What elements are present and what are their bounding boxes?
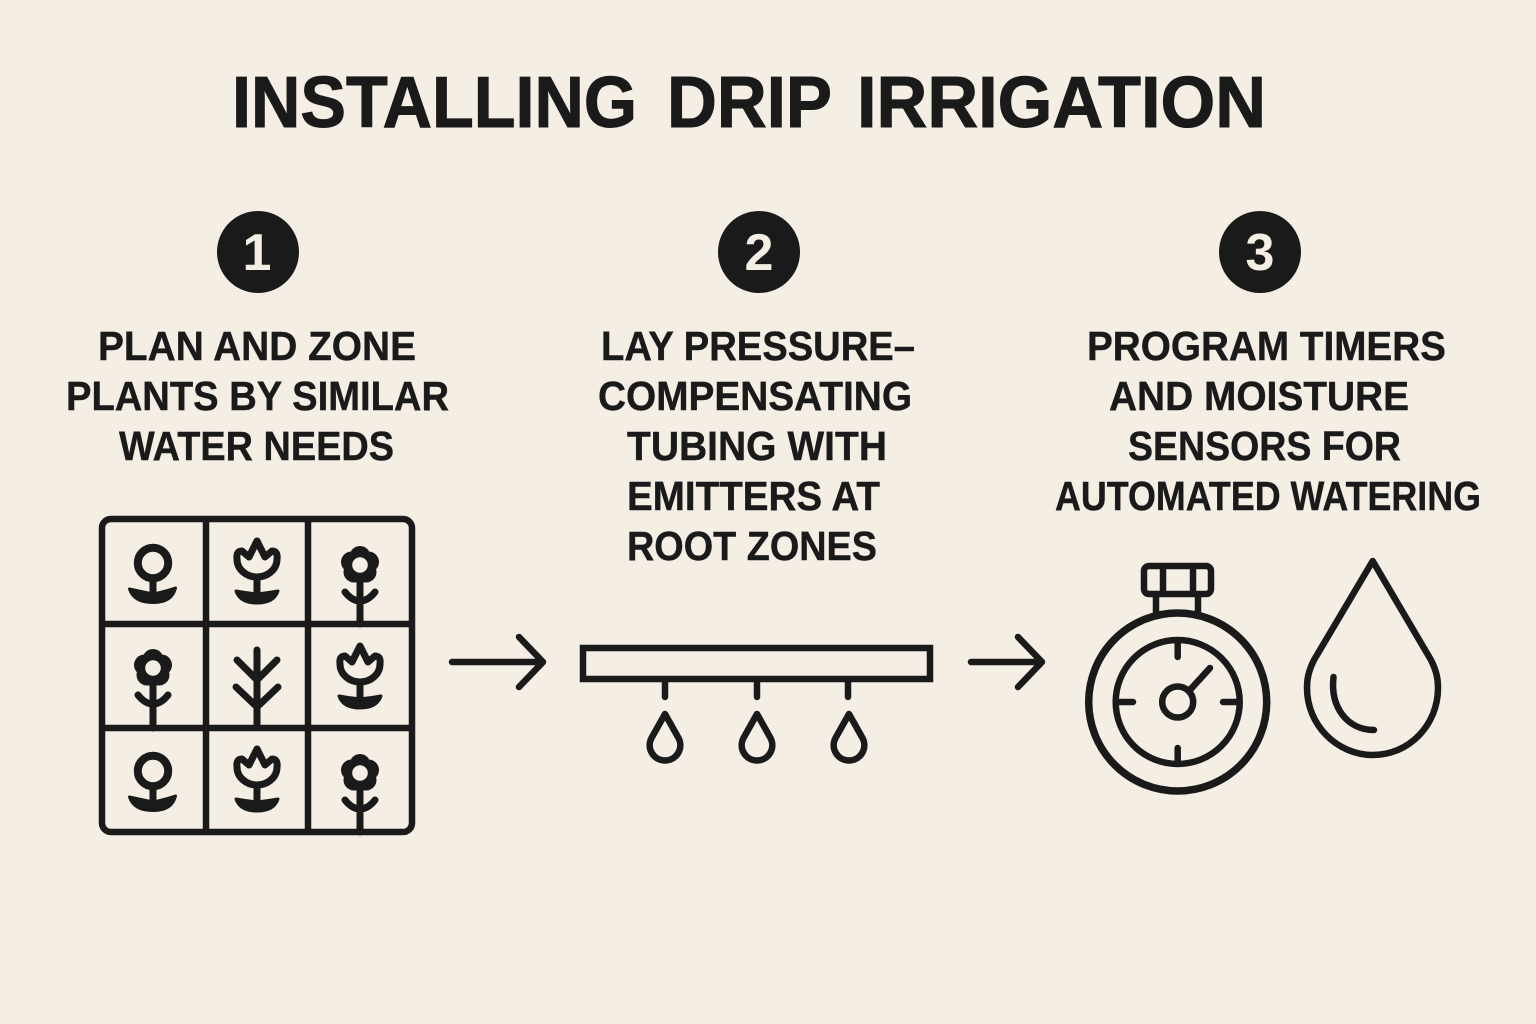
icon: tulip, row 3 column 2 [236,749,278,811]
step 2 description: COMPENSATING [598,373,912,419]
step 2 description: LAY PRESSURE– [601,323,915,369]
step number 2 badge: 2 [745,224,773,282]
step 2 description [598,323,915,569]
icon: daisy, row 3 column 3 [341,754,379,832]
icon: daisy, row 2 column 1 [134,649,172,728]
step 3 description: SENSORS FOR [1128,423,1401,469]
arrow: step 2 to step 3 [971,637,1042,687]
step 1 description [66,323,449,469]
step number 2 badge [718,211,800,293]
icon: sprout, row 2 column 2 [236,650,278,727]
step number 1 badge [217,211,299,293]
icon: water drop 3 [834,714,864,760]
panel: step 1 plan and zone [66,211,449,832]
step 1 description: WATER NEEDS [119,423,394,469]
step number 3 badge: 3 [1246,224,1274,282]
icon: ring flower, row 1 column 1 [130,548,176,602]
step 3 description: AUTOMATED WATERING [1055,473,1481,519]
step number 1 badge: 1 [243,224,271,282]
arrow: step 1 to step 2 [452,637,543,687]
title: INSTALLING [232,63,637,143]
step 3 description [1055,323,1481,519]
icon: planting zone grid [102,519,412,832]
icon: moisture drop [1307,561,1438,755]
icon: drip tubing with emitters [583,648,930,760]
step 3 description: AND MOISTURE [1109,373,1409,419]
icon: ring flower, row 3 column 1 [130,756,176,810]
icon: tulip, row 2 column 3 [339,646,381,708]
step number 3 badge [1219,211,1301,293]
icon: daisy, row 1 column 3 [341,546,379,624]
icon: tulip, row 1 column 2 [236,541,278,603]
step 2 description: TUBING WITH [627,423,887,469]
icon: water drop 1 [650,714,680,760]
step 1 description: PLAN AND ZONE [98,323,416,369]
title [232,63,1266,143]
icon: timer [1089,566,1267,791]
title: IRRIGATION [857,63,1266,143]
step 3 description: PROGRAM TIMERS [1087,323,1446,369]
icon: water drop 2 [742,714,772,760]
step 1 description: PLANTS BY SIMILAR [66,373,449,419]
step 2 description: EMITTERS AT [627,473,880,519]
step 2 description: ROOT ZONES [627,523,877,569]
panel: step 2 lay tubing [583,211,930,760]
title: DRIP [667,63,832,143]
panel: step 3 program timers [1055,211,1481,791]
